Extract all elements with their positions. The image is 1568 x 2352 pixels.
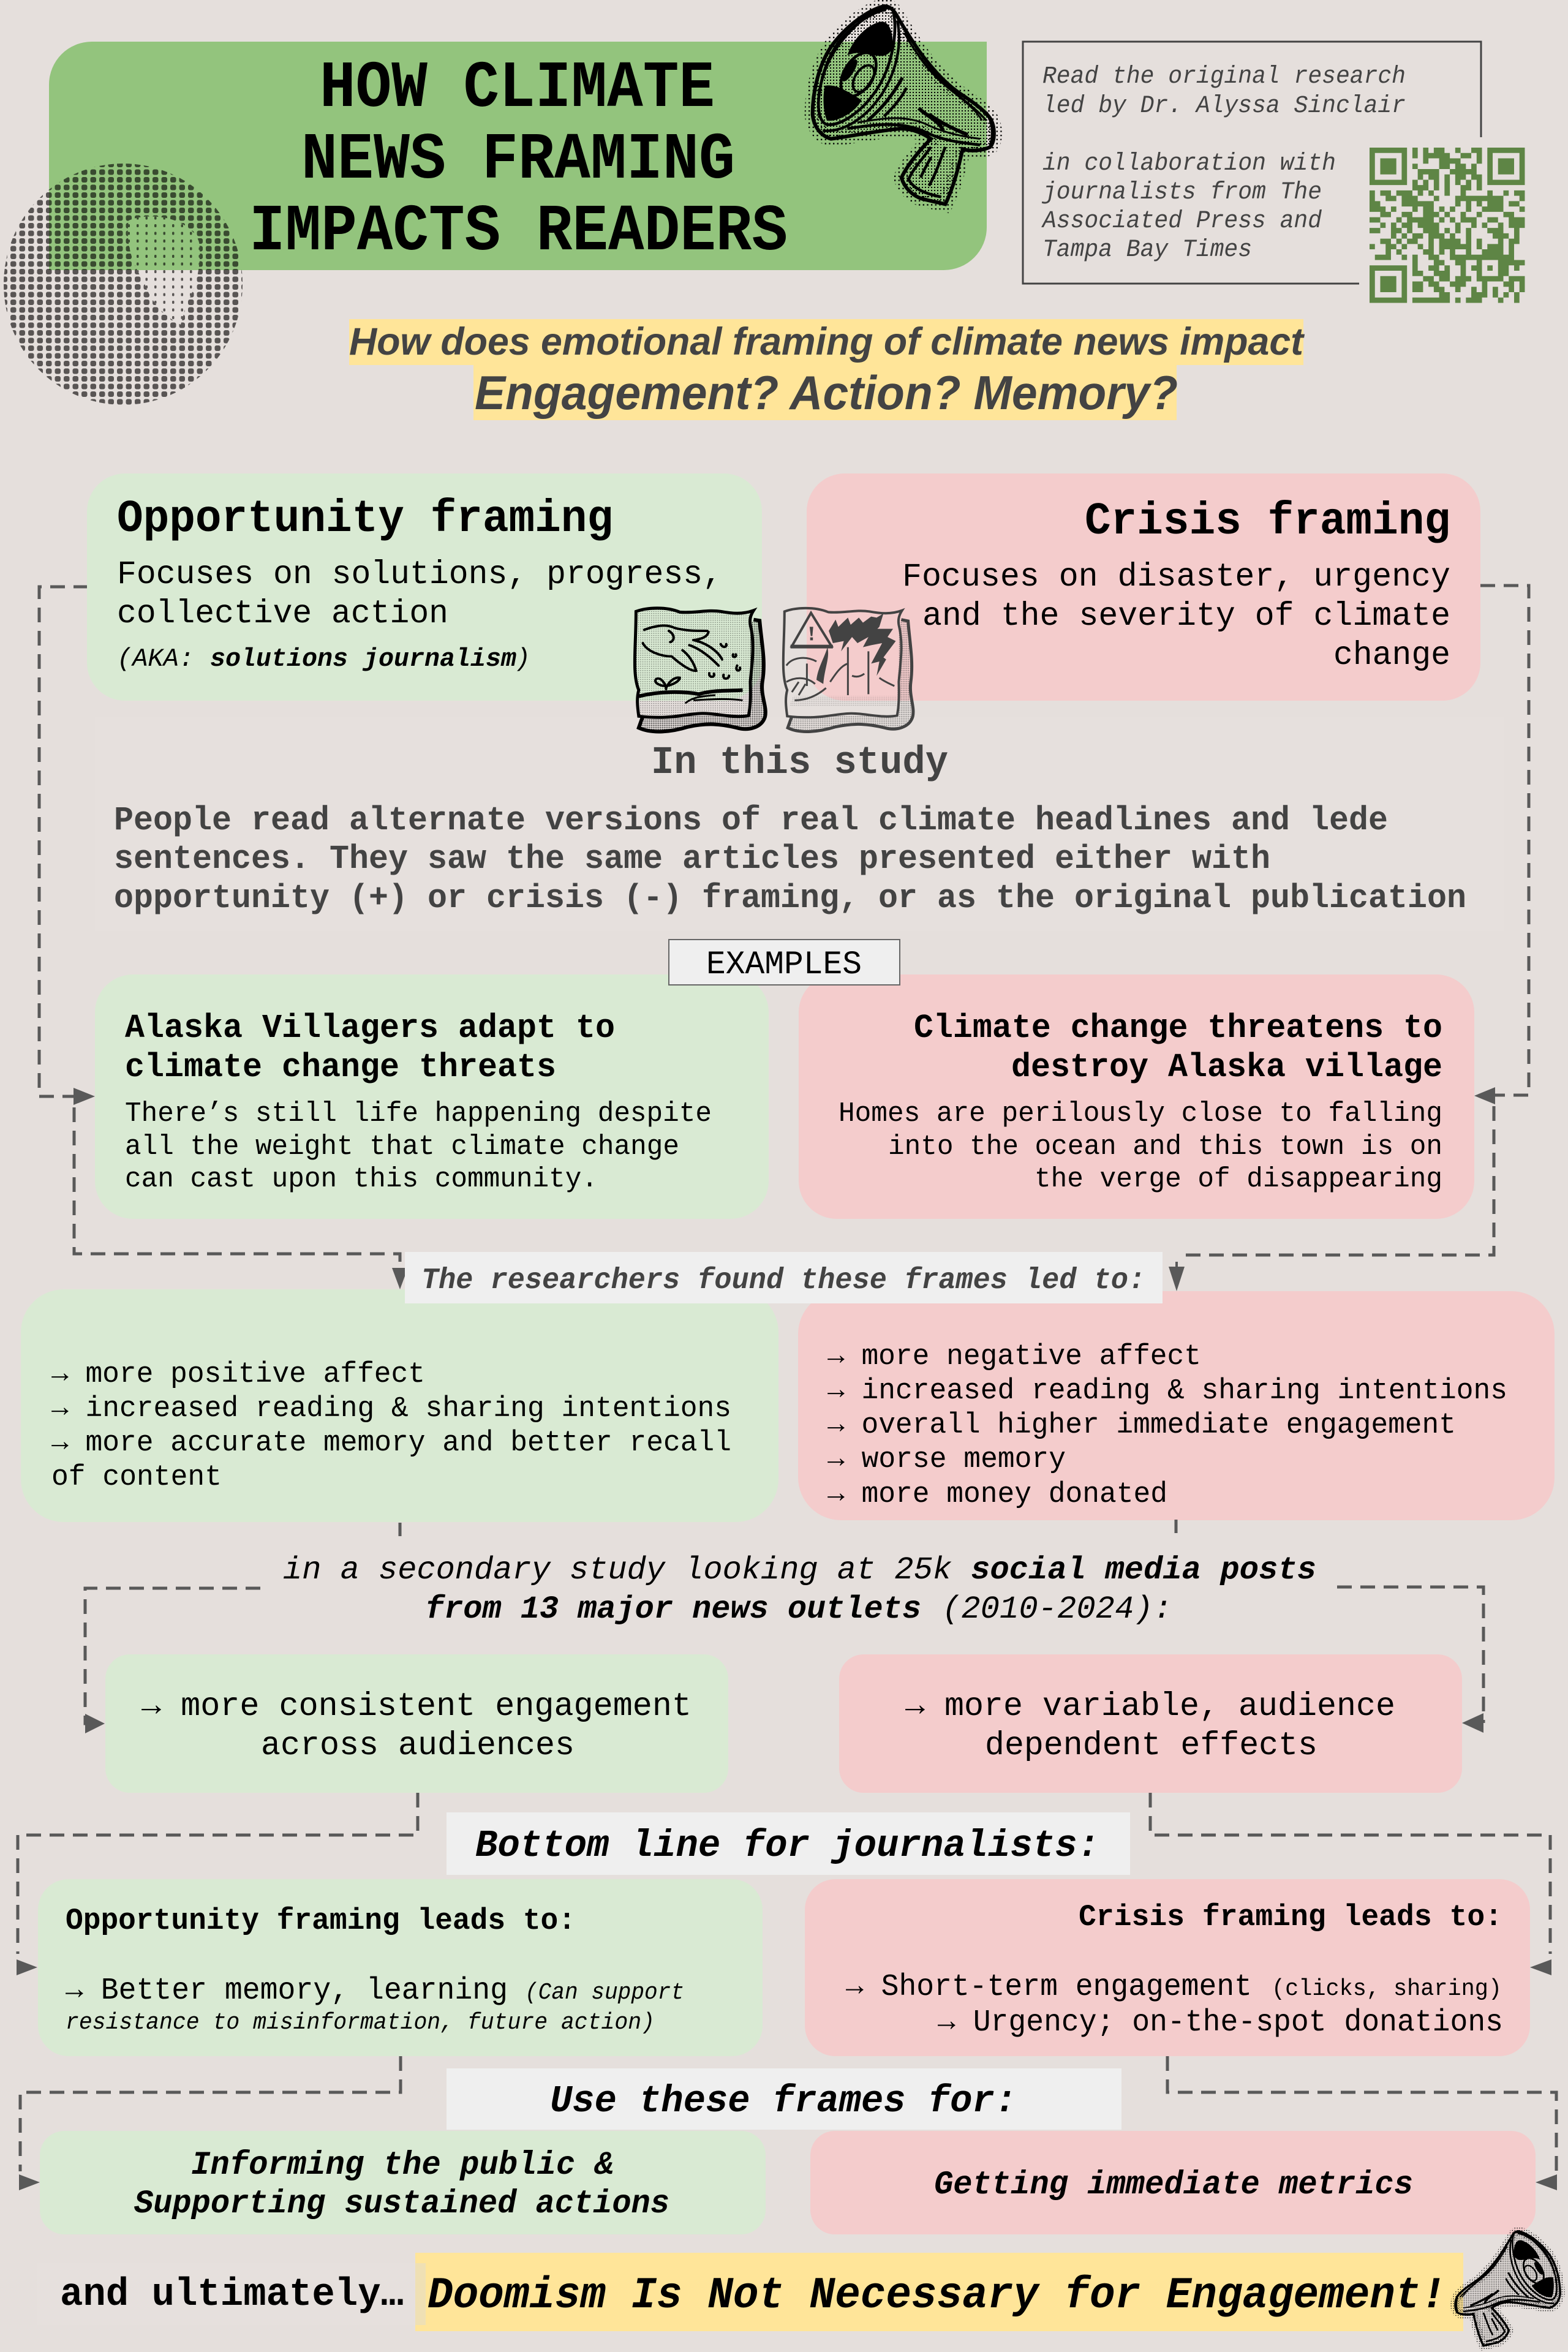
- panel: research credit: [1023, 42, 1537, 309]
- panel: example crisis headline: into the ocean and this town is on: [888, 1131, 1442, 1163]
- secondary study text: in a secondary study looking at 25k: [283, 1552, 952, 1588]
- icon: halftone globe: [0, 159, 248, 410]
- arrow: secondary study left: [85, 1588, 260, 1733]
- panel: opportunity framing: ): [515, 644, 530, 674]
- icon: wildfire warning sheet: [783, 608, 913, 731]
- arrow: example opportunity to findings: [74, 1107, 408, 1289]
- panel: opportunity bottom line: Opportunity framing leads to:: [66, 1904, 576, 1938]
- panel: research credit: Tampa Bay Times: [1042, 236, 1252, 264]
- research question: How does emotional framing of climate news impact: [349, 320, 1305, 363]
- panel: crisis findings: → overall higher immediate engagement: [827, 1409, 1456, 1442]
- panel: example crisis headline: [799, 974, 1474, 1219]
- secondary study text: [283, 1552, 1316, 1627]
- panel: opportunity use: Supporting sustained actions: [134, 2185, 669, 2223]
- panel: crisis findings: → more negative affect: [827, 1341, 1201, 1373]
- panel: example opportunity headline: [95, 974, 769, 1219]
- panel: opportunity framing: collective action: [117, 595, 448, 633]
- panel: opportunity bottom line: resistance to misinformation, future action): [66, 2010, 655, 2036]
- panel: opportunity bottom line: → Better memory, learning: [66, 1973, 508, 2008]
- panel: example opportunity headline: There’s still life happening despite: [125, 1098, 712, 1129]
- secondary study text: (2010-2024):: [942, 1591, 1172, 1627]
- panel: opportunity secondary result: [105, 1654, 728, 1793]
- panel: research credit: led by Dr. Alyssa Sinclair: [1042, 92, 1406, 120]
- panel: opportunity findings: → more accurate memory and better recall: [51, 1427, 731, 1460]
- heading: use these frames for: [447, 2068, 1121, 2130]
- panel: opportunity findings: → more positive affect: [51, 1359, 425, 1391]
- panel: opportunity bottom line: [38, 1879, 763, 2056]
- panel: crisis use: Getting immediate metrics: [934, 2166, 1413, 2204]
- label: examples: [669, 940, 900, 985]
- panel: example opportunity headline: all the weight that climate change: [125, 1131, 679, 1163]
- panel: opportunity findings: of content: [51, 1461, 222, 1494]
- arrow: opportunity framing to example: [39, 587, 95, 1105]
- panel: crisis bottom line: → Short-term engagement: [846, 1970, 1252, 2005]
- panel: crisis framing: and the severity of climate: [922, 598, 1450, 635]
- panel: in this study: [95, 717, 1504, 931]
- panel: crisis secondary result: [839, 1654, 1462, 1793]
- panel: opportunity findings: → increased reading & sharing intentions: [51, 1393, 731, 1425]
- heading: bottom line for journalists: Bottom line for journalists:: [475, 1824, 1099, 1868]
- panel: example crisis headline: Homes are perilously close to falling: [839, 1098, 1442, 1129]
- panel: crisis findings: [798, 1291, 1555, 1520]
- panel: opportunity secondary result: across audiences: [261, 1727, 575, 1765]
- panel: opportunity findings: [21, 1289, 778, 1522]
- panel: example opportunity headline: climate change threats: [125, 1048, 556, 1087]
- arrow: crisis framing to example: [1474, 586, 1529, 1104]
- label: researchers found: The researchers found these frames led to:: [421, 1264, 1145, 1297]
- title: NEWS FRAMING: [301, 123, 735, 198]
- study description: People read alternate versions of real climate headlines and lede: [114, 801, 1388, 840]
- conclusion lead-in: and ultimately…: [60, 2273, 404, 2317]
- arrow: to crisis bottom line: [1150, 1793, 1551, 1975]
- panel: example opportunity headline: Alaska Villagers adapt to: [125, 1009, 615, 1047]
- conclusion highlight: [415, 2253, 1463, 2331]
- study description: opportunity (+) or crisis (-) framing, or as the original publication: [114, 879, 1466, 918]
- arrow: example crisis to findings: [1169, 1106, 1494, 1291]
- secondary study text: social media posts: [971, 1552, 1316, 1588]
- panel: opportunity framing: Focuses on solutions, progress,: [117, 556, 722, 594]
- research question: [349, 319, 1305, 420]
- research question: Engagement? Action? Memory?: [475, 366, 1178, 420]
- panel: opportunity framing: (AKA:: [117, 644, 194, 674]
- panel: crisis framing: [807, 473, 1480, 701]
- panel: crisis findings: → more money donated: [827, 1479, 1167, 1511]
- icon: megaphone top: [813, 6, 994, 204]
- panel: title banner: [49, 42, 987, 270]
- title: HOW CLIMATE: [320, 51, 715, 126]
- arrow: to opportunity bottom line: [17, 1793, 418, 1975]
- panel: opportunity framing: solutions journalism: [210, 644, 516, 674]
- panel: crisis bottom line: (clicks, sharing): [1272, 1976, 1502, 2002]
- panel: opportunity use: [40, 2131, 766, 2234]
- panel: research credit: journalists from The: [1041, 179, 1322, 206]
- panel: crisis secondary result: → more variable, audience: [905, 1688, 1395, 1725]
- conclusion highlight: Doomism Is Not Necessary for Engagement!: [428, 2271, 1446, 2321]
- heading: use these frames for: Use these frames for:: [550, 2079, 1017, 2123]
- arrow: secondary study right: [1337, 1587, 1483, 1733]
- label: examples: EXAMPLES: [706, 946, 862, 984]
- panel: opportunity secondary result: → more consistent engagement: [141, 1688, 692, 1725]
- panel: opportunity framing: [87, 473, 762, 701]
- panel: research credit: in collaboration with: [1042, 150, 1336, 178]
- arrow: to informing the public: [19, 2056, 401, 2190]
- panel: crisis framing: Crisis framing: [1085, 496, 1450, 548]
- heading: in this study: In this study: [651, 741, 948, 785]
- title: [249, 51, 788, 270]
- heading: bottom line for journalists: [447, 1812, 1130, 1875]
- panel: opportunity framing: Opportunity framing: [117, 494, 613, 545]
- icon: QR code: [1370, 148, 1525, 303]
- conclusion lead-in: [37, 2263, 426, 2325]
- panel: research credit: Associated Press and: [1041, 208, 1322, 235]
- panel: example opportunity headline: can cast upon this community.: [125, 1164, 598, 1195]
- panel: crisis bottom line: Crisis framing leads to:: [1079, 1900, 1502, 1934]
- panel: crisis bottom line: → Urgency; on-the-spot donations: [938, 2005, 1503, 2040]
- label: researchers found: [405, 1252, 1163, 1303]
- icon: hand planting seed sheet: [635, 608, 766, 731]
- panel: crisis framing: Focuses on disaster, urgency: [902, 559, 1450, 596]
- panel: research credit: Read the original research: [1042, 63, 1406, 91]
- panel: opportunity use: Informing the public &: [191, 2147, 614, 2184]
- panel: opportunity bottom line: (Can support: [525, 1980, 684, 2006]
- panel: example crisis headline: destroy Alaska village: [1011, 1048, 1442, 1087]
- study description: [114, 801, 1466, 918]
- secondary study text: from 13 major news outlets: [425, 1591, 921, 1627]
- icon: megaphone bottom: [1455, 2231, 1560, 2346]
- panel: example crisis headline: Climate change threatens to: [914, 1009, 1442, 1047]
- panel: crisis framing: change: [1333, 637, 1450, 674]
- panel: example crisis headline: the verge of disappearing: [1035, 1164, 1442, 1195]
- panel: crisis findings: → increased reading & sharing intentions: [827, 1375, 1507, 1408]
- panel: crisis secondary result: dependent effects: [985, 1727, 1317, 1765]
- study description: sentences. They saw the same articles presented either with: [114, 840, 1270, 878]
- arrow: to getting immediate metrics: [1167, 2056, 1557, 2190]
- panel: crisis findings: → worse memory: [827, 1444, 1066, 1476]
- title: IMPACTS READERS: [249, 195, 788, 270]
- connector stubs below findings: [400, 1520, 1176, 1536]
- panel: crisis use: [810, 2131, 1536, 2234]
- panel: crisis bottom line: [805, 1879, 1530, 2056]
